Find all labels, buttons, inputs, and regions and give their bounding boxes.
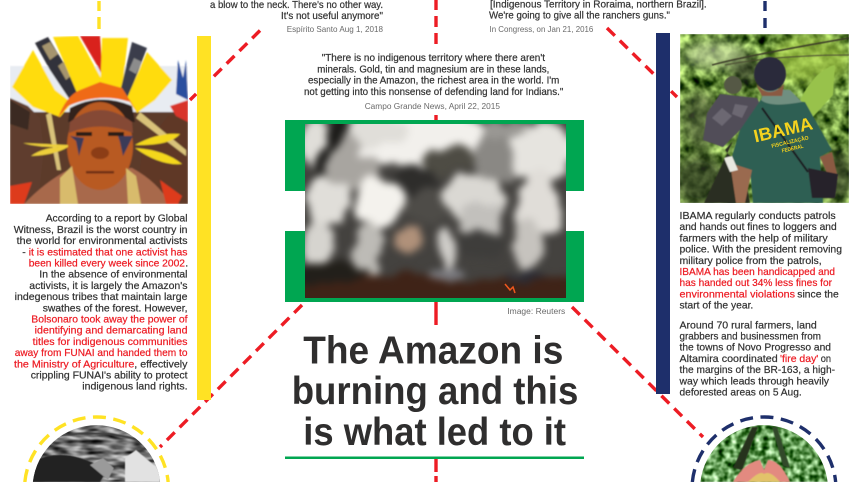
centre quote: "There is no indigenous territory where there aren't [322, 52, 545, 64]
shirt lettering: IBAMA [752, 113, 815, 146]
left text block: away from FUNAI and handed them to [15, 347, 188, 359]
red dashed connector: bottom left [160, 305, 302, 447]
right text block: Altamira coordinated [680, 353, 778, 365]
right text block: has handed out 34% less fines for [680, 277, 832, 289]
right text block: way which leads through heavily [679, 375, 830, 387]
photo: indigenous man with yellow feather headdress [10, 36, 188, 204]
right text block: IBAMA regularly conducts patrols [680, 210, 836, 222]
right text block: the margins of the BR-163, a high- [680, 364, 835, 376]
yellow dashed connector: top [97, 1, 101, 29]
left text block: swathes of the forest. However, [43, 302, 188, 314]
left text block [14, 213, 188, 393]
left text block: it is estimated that one activist has [29, 246, 188, 258]
red dashed connector: top left [190, 30, 260, 100]
main title: burning and this [292, 370, 578, 413]
right text block: since the [797, 288, 839, 300]
yellow vertical bar [197, 36, 211, 400]
shirt lettering: FEDERAL [781, 144, 805, 155]
left text block: Witness, Brazil is the worst country in [14, 224, 188, 236]
image credit: Image: Reuters [507, 306, 565, 316]
green title underline [285, 456, 584, 459]
centre quote [304, 52, 564, 111]
top left quote [210, 0, 383, 34]
right text block: the towns of Novo Progresso and [680, 342, 831, 354]
left text block: titles for indigenous communities [33, 336, 188, 348]
red dashed connector: top right [607, 28, 677, 97]
top right quote: In Congress, on Jan 21, 2016 [490, 24, 593, 34]
green photo frame [285, 120, 584, 302]
left text block: activists, it is largely the Amazon's [29, 280, 187, 292]
centre quote: minerals. Gold, tin and magnesium are in these lands, [317, 63, 549, 75]
photo: Amazon fire smoke [305, 124, 566, 298]
right text block: start of the year. [680, 300, 753, 312]
left text block: indegenous tribes that maintain large [15, 291, 188, 303]
navy dashed connector: top [763, 1, 767, 28]
red dashed connector: centre vertical [434, 0, 438, 482]
right text block: deforested areas on 5 Aug. [680, 386, 802, 398]
top left quote: Espírito Santo Aug 1, 2018 [287, 24, 383, 34]
right text block [679, 210, 842, 398]
top left quote: It's not useful anymore" [281, 10, 383, 22]
right text block: 'fire day' [780, 353, 818, 365]
right text block: grabbers and businessmen from [680, 330, 821, 342]
left text block: Bolsonaro took away the power of [31, 314, 188, 326]
left text block: In the absence of environmental [39, 269, 187, 281]
right text block: military police from the patrols, [680, 255, 822, 267]
main title [292, 329, 578, 454]
left text block: , effectively [134, 358, 188, 370]
left text block: . [185, 258, 188, 270]
navy vertical bar [656, 33, 670, 394]
centre quote: not getting into this nonsense of defending land for Indians." [304, 86, 564, 98]
circular photo: hands holding soybeans with navy dashed ring [692, 417, 836, 482]
centre quote: Campo Grande News, April 22, 2015 [365, 101, 500, 111]
left text block: According to a report by Global [46, 213, 188, 225]
left text block: - [22, 246, 26, 258]
right text block: Around 70 rural farmers, land [680, 319, 817, 331]
red dashed connector: bottom right [572, 307, 703, 437]
right text block: on [821, 353, 831, 365]
right text block: IBAMA has been handicapped and [680, 266, 835, 278]
shirt lettering: FISCALIZAÇÃO [771, 134, 810, 150]
top right quote: We're going to give all the ranchers guns." [489, 9, 670, 21]
left text block: crippling FUNAI's ability to protect [31, 370, 188, 382]
centre quote: especially in the Amazon, the richest area in the world. I'm [308, 75, 560, 87]
left text block: been killed every week since 2002 [29, 258, 185, 270]
left text block: identifying and demarcating land [35, 325, 188, 337]
left text block: the Ministry of Agriculture [14, 358, 134, 370]
right text block: environmental violations [680, 288, 795, 300]
top right quote [489, 0, 707, 34]
left text block: the world for environmental activists [17, 235, 188, 247]
main title: The Amazon is [303, 329, 563, 372]
left text block: indigenous land rights. [82, 381, 188, 393]
right text block: and hands out fines to loggers and [680, 221, 837, 233]
right text block: police. With the president removing [680, 244, 842, 256]
photo: IBAMA patrol in the forest [674, 34, 854, 206]
main title: is what led to it [303, 411, 566, 454]
circular photo: black and white portrait with yellow dashed ring [25, 417, 168, 482]
right text block: farmers with the help of military [680, 232, 828, 244]
